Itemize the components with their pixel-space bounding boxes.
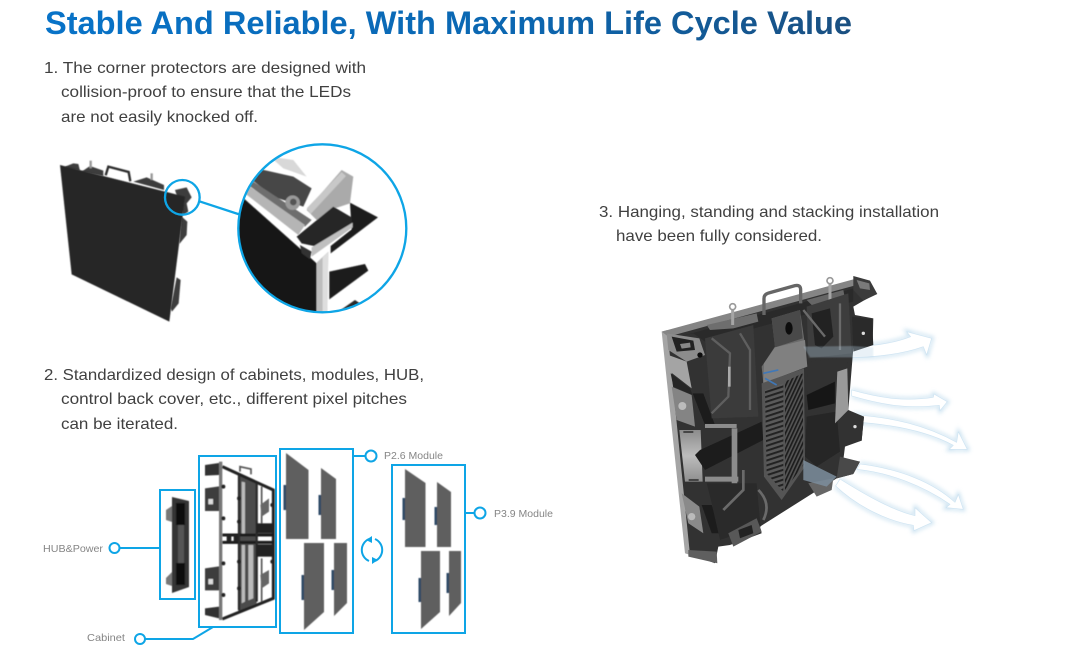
text block: point 3: have been fully considered. — [616, 228, 822, 245]
text block: point 1: 1. The corner protectors are designed with — [44, 60, 366, 77]
cabinet top and side hardware — [65, 161, 192, 312]
cabinet connector and label — [87, 627, 213, 644]
airflow overlay on cabinet — [803, 346, 873, 357]
frame ears — [205, 463, 219, 476]
lower rib panels — [707, 483, 761, 540]
connector line — [199, 201, 240, 215]
cabinet handle — [764, 285, 801, 315]
P2.6 connector and label: P2.6 Module — [384, 450, 443, 462]
cabinet connector and label: Cabinet — [87, 632, 125, 644]
centre HUB — [762, 310, 807, 383]
P3.9 connector and label — [465, 508, 553, 520]
cabinet frame box — [199, 456, 276, 627]
cabinet front face — [60, 165, 185, 322]
frame handle — [240, 467, 251, 474]
text block: point 3 — [599, 204, 939, 245]
P2.6 connector and label — [353, 450, 443, 462]
frame mesh — [238, 473, 257, 612]
right mount brackets — [852, 317, 873, 352]
left side panels — [668, 355, 692, 388]
frame rail — [219, 462, 222, 620]
text block: point 2 — [44, 367, 424, 433]
HUB and power box — [160, 490, 195, 599]
airflow arrows — [810, 331, 968, 532]
magnified corner lens — [227, 144, 406, 317]
illustration: cabinet front with corner protector — [60, 144, 406, 322]
text block: point 3: 3. Hanging, standing and stacking installation — [599, 204, 939, 221]
small highlight circle — [165, 180, 200, 215]
feet — [808, 478, 833, 497]
text block: point 2: control back cover, etc., different pixel pitches — [61, 391, 407, 408]
hanging hooks — [728, 309, 737, 325]
HUB connector and label: HUB&Power — [43, 543, 104, 555]
illustration: cabinet rear with airflow arrows — [662, 276, 968, 563]
text block: point 1: are not easily knocked off. — [61, 109, 258, 126]
title: Stable And Reliable, With Maximum Life Cycle Value — [45, 5, 852, 41]
top right corner hardware — [853, 276, 877, 301]
inner rib panels — [705, 325, 758, 418]
cabinet body — [662, 276, 877, 563]
HUB connector and label — [43, 543, 160, 555]
icon: swap arrows — [362, 536, 382, 564]
centre crossbars — [695, 422, 763, 470]
front plate edge — [662, 330, 690, 555]
text block: point 1: collision-proof to ensure that the LEDs — [61, 84, 351, 101]
top rail — [662, 279, 857, 337]
right side panels — [807, 293, 852, 358]
exploded diagram — [43, 449, 553, 644]
P3.9 modules box — [392, 465, 465, 633]
P3.9 connector and label: P3.9 Module — [494, 508, 553, 520]
text block: point 2: 2. Standardized design of cabinets, modules, HUB, — [44, 367, 424, 384]
P2.6 modules box — [280, 449, 353, 633]
text block: point 2: can be iterated. — [61, 416, 178, 433]
power connector — [667, 333, 705, 362]
text block: point 1 — [44, 60, 366, 126]
